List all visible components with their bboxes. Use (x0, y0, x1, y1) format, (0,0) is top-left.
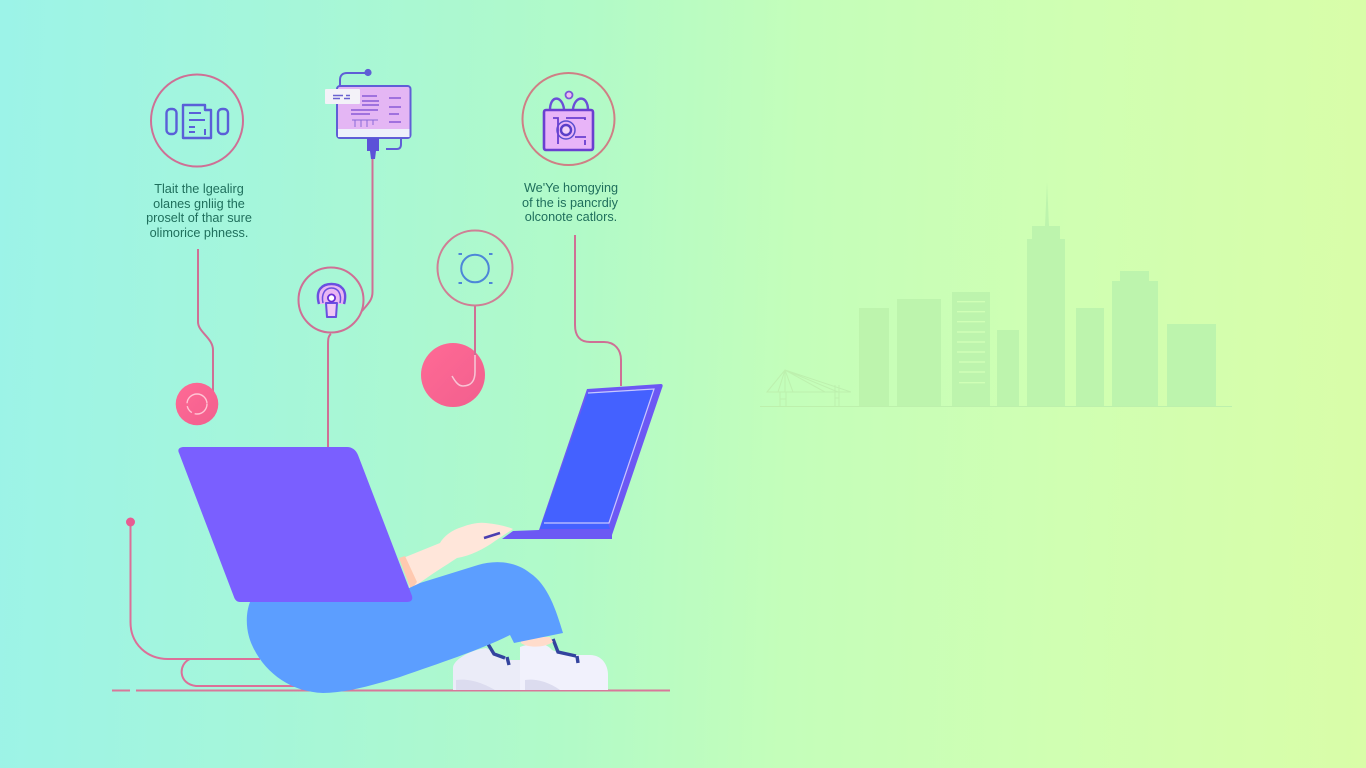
connector: small circle to laptop (328, 334, 331, 447)
ground line (112, 690, 670, 692)
circle icon: target ring (438, 230, 512, 306)
connector: left callout line (198, 249, 213, 392)
circle icon: document (151, 74, 243, 166)
circle icon: camera (522, 73, 614, 165)
callout text: right (522, 181, 619, 224)
callout text: left: Tlait the lgealirg (154, 182, 244, 196)
callout text: left: proselt of thar sure (146, 211, 252, 225)
callout text: right: We'Ye homgying (524, 181, 618, 195)
connector: right callout line (575, 235, 621, 386)
bridge outline (767, 370, 851, 406)
callout text: right: of the is pancrdiy (522, 196, 619, 210)
shoes (453, 637, 608, 690)
callout text: left (146, 182, 252, 240)
pink dot: large (421, 306, 485, 407)
pink dot: small (176, 383, 218, 425)
connector: monitor line (362, 158, 372, 311)
callout text: left: olanes gnliig the (153, 197, 245, 211)
arm (403, 523, 513, 590)
city skyline (760, 182, 1232, 406)
callout text: right: olconote catlors. (525, 210, 617, 224)
callout text: left: olimorice phness. (150, 226, 248, 240)
monitor icon (325, 69, 410, 159)
laptop: back lid (178, 447, 412, 602)
sleeve cuff (399, 556, 417, 590)
circle icon: headset (298, 268, 364, 332)
laptop: open side view (484, 384, 663, 539)
legs (247, 562, 563, 693)
connector: left floor cable (126, 518, 300, 686)
